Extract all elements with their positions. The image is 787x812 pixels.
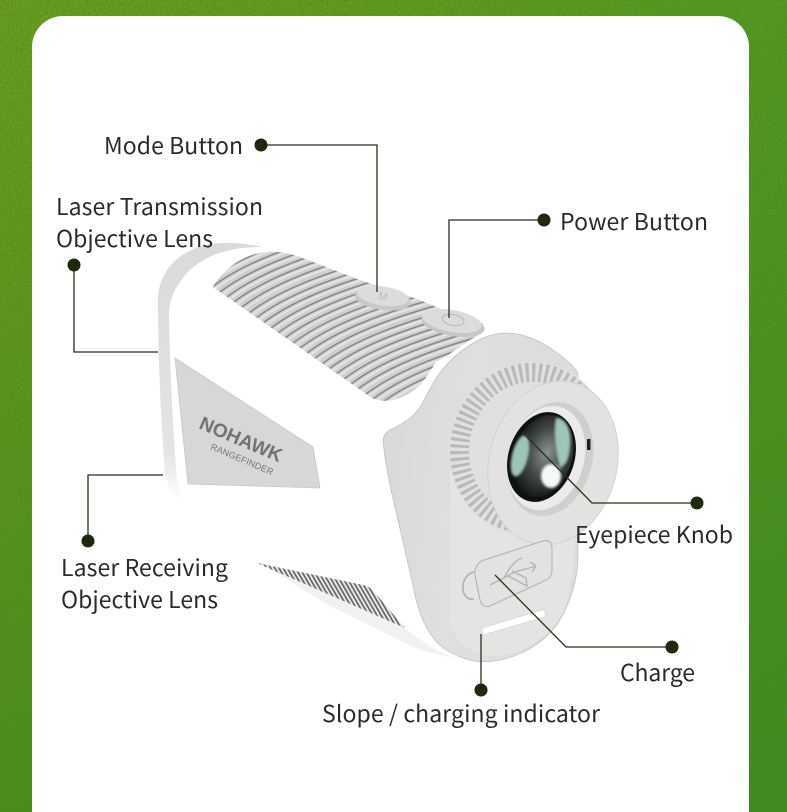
device body [158, 243, 580, 662]
indicator slit [482, 610, 545, 635]
callout: charge: Charge [620, 654, 695, 688]
inner plate step [450, 470, 575, 656]
logo text: NOHAWK [196, 413, 286, 467]
eyepiece lens [496, 403, 587, 511]
mode button [354, 283, 412, 314]
callout: laser transmission objective lens [56, 188, 263, 352]
callout: laser transmission objective lens: Laser Transmission [56, 188, 263, 222]
logo plate [175, 358, 320, 488]
callout: power button [449, 203, 708, 318]
ribbed grip [213, 252, 478, 401]
callout: laser receiving objective lens: Laser Receiving [61, 549, 228, 583]
eyepiece cup [471, 367, 635, 559]
power button [419, 305, 487, 341]
lower body shading [255, 560, 470, 662]
callout: mode button [104, 127, 377, 292]
bottom ribbed strip [257, 563, 405, 628]
callout: mode button: Mode Button [104, 127, 243, 161]
callout: charge [495, 575, 695, 688]
callout: laser transmission objective lens: Objective Lens [56, 220, 213, 254]
rear grey strip [158, 243, 262, 504]
callout: laser receiving objective lens [61, 475, 228, 615]
rangefinder device [158, 226, 635, 662]
callout: slope / charging indicator: Slope / charging indicator [322, 695, 600, 729]
logo text: RANGEFINDER [209, 442, 275, 477]
USB port cover [463, 540, 552, 607]
rear plate [383, 333, 578, 662]
inner lens ring [494, 392, 606, 526]
callout: slope / charging indicator [322, 634, 600, 729]
callout: eyepiece knob: Eyepiece Knob [575, 516, 733, 550]
mode button: M [377, 290, 389, 304]
knurled focus ring [430, 344, 628, 552]
callout: eyepiece knob [522, 432, 733, 550]
callout: laser receiving objective lens: Objective Lens [61, 581, 218, 615]
callout: power button: Power Button [560, 203, 708, 237]
